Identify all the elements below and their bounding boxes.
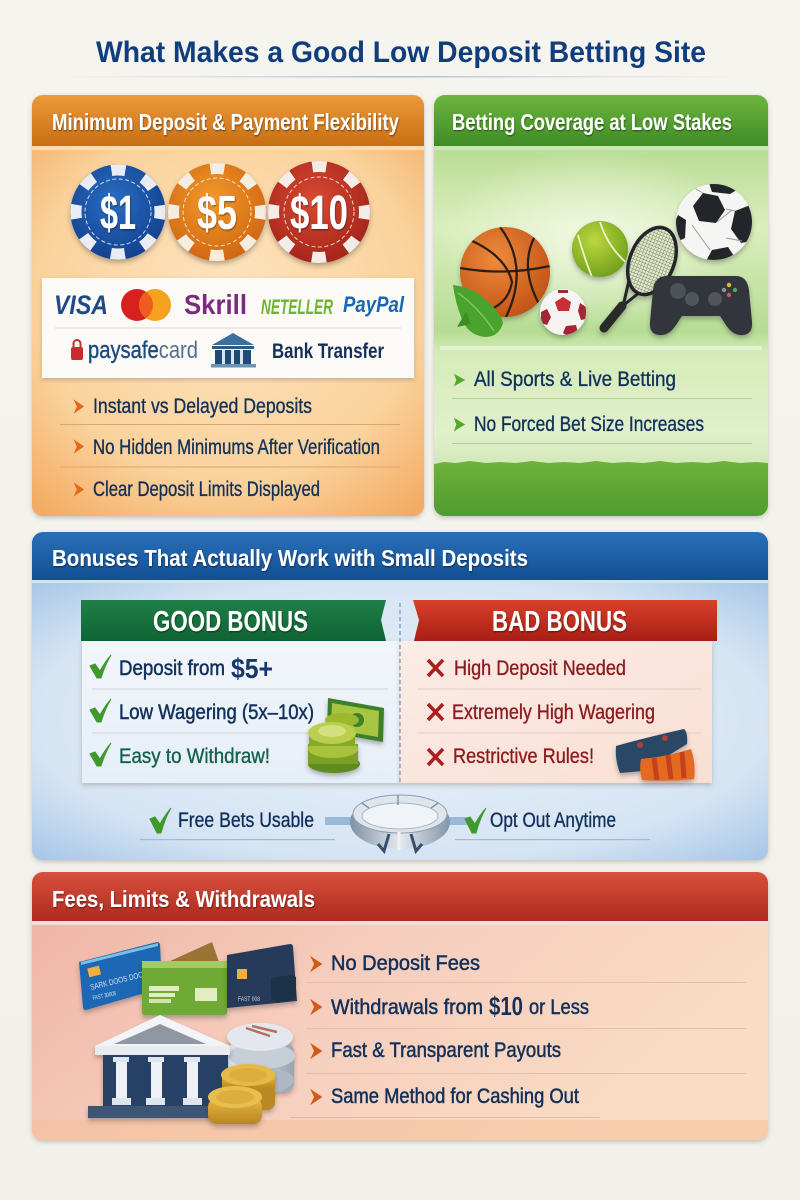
payment methods card bbox=[42, 278, 414, 378]
icon: green wallet bbox=[142, 961, 227, 1015]
icon: soccer ball bbox=[673, 184, 755, 266]
icon: tennis racket bbox=[604, 220, 686, 328]
illustration: sports equipment bbox=[453, 180, 763, 338]
panel: minimum deposit and payment flexibility bbox=[32, 95, 424, 516]
item: clear limits: Clear Deposit Limits Displayed bbox=[93, 478, 320, 501]
item: withdrawals from $10 bbox=[312, 991, 589, 1021]
chips: deposit amounts bbox=[70, 161, 370, 263]
extra: free bets usable bbox=[140, 808, 335, 840]
item: no deposit fees: No Deposit Fees bbox=[331, 952, 480, 975]
item: no hidden minimums: No Hidden Minimums After Verification bbox=[93, 436, 380, 459]
item: withdrawals from $10: $10 bbox=[489, 991, 523, 1021]
logo: visa: VISA bbox=[54, 290, 108, 320]
banner: bad bonus bbox=[413, 600, 717, 641]
icon: blue card: FAST 30005 bbox=[92, 991, 117, 1002]
logo: skrill: Skrill bbox=[184, 289, 247, 320]
banner: good bonus bbox=[81, 600, 386, 641]
list: coverage features bbox=[452, 368, 752, 444]
list: fee features bbox=[290, 952, 746, 1118]
icon: brown wallet bbox=[168, 942, 219, 962]
icon: tennis ball bbox=[572, 221, 630, 277]
icon: silver coin stack bbox=[226, 1023, 295, 1093]
grass strip bbox=[434, 461, 768, 516]
icon: basketball bbox=[460, 227, 550, 317]
icon: game controller bbox=[650, 276, 752, 335]
chip: $5: $5 bbox=[197, 187, 237, 240]
icon: small soccer ball bbox=[540, 289, 586, 338]
icon: blue card: SARK DOOS DOC bbox=[89, 970, 144, 992]
icon: restrictive wallets bbox=[616, 729, 695, 781]
item: instant vs delayed: Instant vs Delayed Deposits bbox=[93, 395, 312, 418]
chip: $10: $10 bbox=[290, 187, 348, 240]
banner: good bonus: GOOD BONUS bbox=[153, 606, 308, 638]
item: easy to withdraw: Easy to Withdraw! bbox=[119, 745, 270, 768]
icon: blue card bbox=[79, 942, 162, 1010]
comparison card bbox=[81, 600, 717, 783]
heading: fees: Fees, Limits & Withdrawals bbox=[52, 886, 315, 912]
item: same method: Same Method for Cashing Out bbox=[331, 1085, 579, 1108]
chip: $5 bbox=[168, 163, 266, 261]
label: bank transfer: Bank Transfer bbox=[272, 340, 384, 363]
item: restrictive rules: Restrictive Rules! bbox=[453, 745, 594, 768]
list: deposit features bbox=[60, 395, 400, 501]
illustration: cards, wallets and bank bbox=[79, 942, 297, 1124]
item: deposit from $5+: $5+ bbox=[231, 653, 273, 684]
icon: bank bbox=[211, 333, 256, 368]
item: deposit from $5+: Deposit from bbox=[119, 657, 225, 680]
item: all sports: All Sports & Live Betting bbox=[474, 368, 676, 391]
heading: minimum deposit: Minimum Deposit & Payment Flexibility bbox=[52, 109, 399, 135]
extra: opt out anytime bbox=[455, 808, 650, 840]
icon: navy wallet: FAST 008 bbox=[238, 997, 261, 1003]
panel: bonuses bbox=[32, 532, 768, 860]
chip: $10 bbox=[268, 161, 370, 263]
item: low wagering: Low Wagering (5x–10x) bbox=[119, 701, 314, 724]
extra: free bets usable: Free Bets Usable bbox=[178, 809, 314, 832]
icon: opt-out ring with arrows bbox=[325, 795, 468, 851]
logo: paysafecard: paysafecard bbox=[88, 337, 198, 364]
item: deposit from $5+ bbox=[90, 653, 273, 684]
chip: $1 bbox=[70, 164, 166, 260]
heading: bonuses: Bonuses That Actually Work with Small Deposits bbox=[52, 545, 528, 571]
logo: mastercard bbox=[121, 289, 171, 321]
title: What Makes a Good Low Deposit Betting Site bbox=[96, 36, 706, 69]
icon: cash and coins bbox=[308, 698, 384, 773]
icon: gold coins bbox=[208, 1064, 275, 1124]
item: withdrawals from $10: or Less bbox=[529, 996, 589, 1019]
item: high deposit needed: High Deposit Needed bbox=[454, 657, 626, 680]
icon: bank building bbox=[88, 1015, 230, 1118]
item: fast payouts: Fast & Transparent Payouts bbox=[331, 1039, 561, 1062]
panel: fees, limits and withdrawals bbox=[32, 872, 768, 1140]
logo: neteller: NETELLER bbox=[261, 296, 334, 319]
chip: $1: $1 bbox=[100, 187, 136, 240]
heading: betting coverage: Betting Coverage at Low Stakes bbox=[452, 109, 732, 135]
icon: navy wallet bbox=[227, 944, 297, 1008]
item: extremely high wagering: Extremely High Wagering bbox=[452, 701, 655, 724]
item: withdrawals from $10: Withdrawals from bbox=[331, 996, 483, 1019]
banner: bad bonus: BAD BONUS bbox=[492, 606, 627, 638]
logo: paypal: PayPal bbox=[343, 292, 405, 317]
panel: betting coverage bbox=[434, 95, 768, 516]
item: no forced bet: No Forced Bet Size Increases bbox=[474, 413, 704, 436]
extra: opt out anytime: Opt Out Anytime bbox=[490, 809, 616, 832]
icon: leaf bbox=[453, 285, 503, 337]
